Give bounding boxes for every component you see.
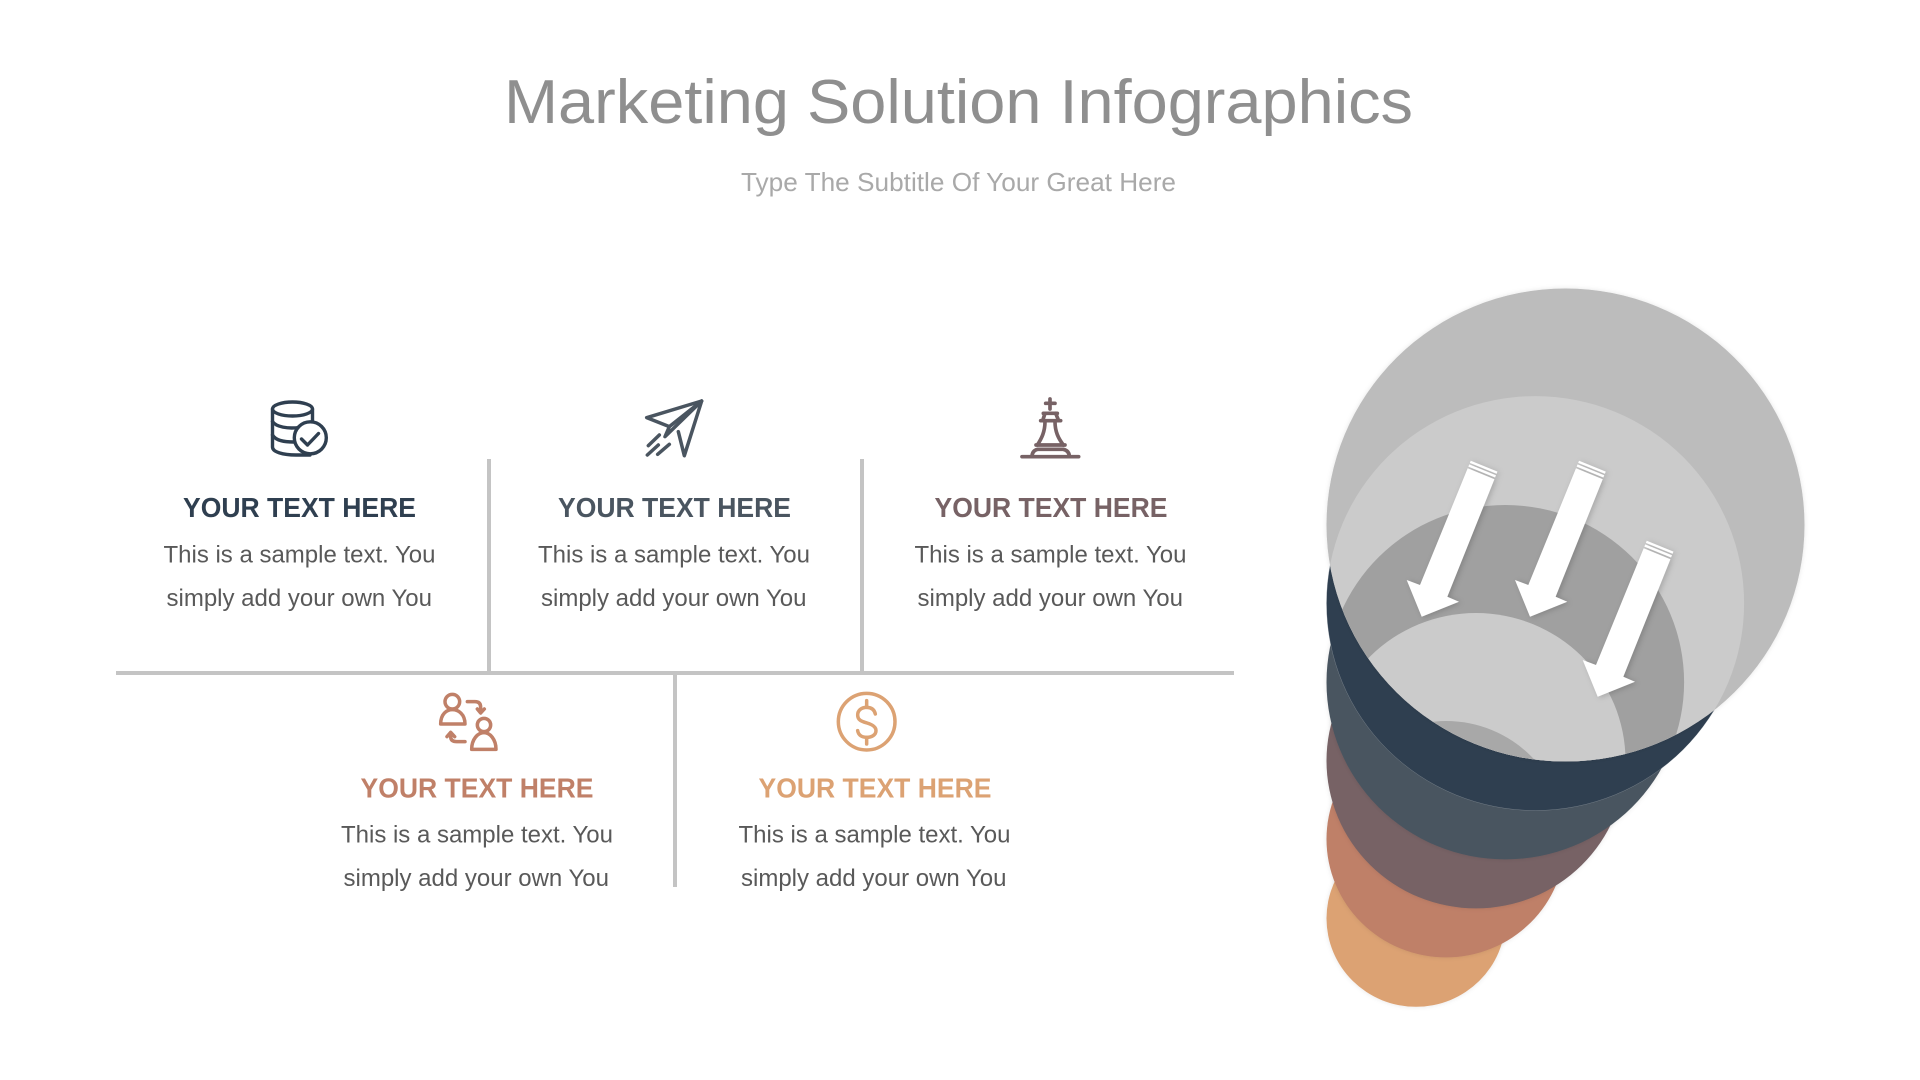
body text: This is a sample text. You [538,542,810,568]
funnel graphic [1326,288,1804,1007]
panel: item 4 [341,694,613,892]
panel: item 5 [738,693,1010,892]
panel: item 3 [914,399,1186,612]
icon: database with check [272,402,326,455]
heading: YOUR TEXT HERE [558,492,791,523]
arrow 2 [1515,462,1605,617]
body text: This is a sample text. You [738,822,1010,848]
subtitle: Type The Subtitle Of Your Great Here [741,167,1176,197]
body text: This is a sample text. You [164,542,436,568]
body text [914,542,1186,612]
body text [341,822,613,892]
heading: YOUR TEXT HERE [360,772,594,804]
body text: This is a sample text. You [341,822,613,848]
body text: simply add your own You [918,585,1183,612]
body text: simply add your own You [741,865,1006,892]
divider lines [116,459,1234,887]
icon: paper plane [647,401,702,456]
body text: simply add your own You [166,585,432,612]
funnel layer: brown [1326,613,1626,908]
heading: YOUR TEXT HERE [934,492,1168,523]
heading: YOUR TEXT HERE [183,492,416,523]
funnel layer: terracotta [1326,721,1566,957]
body text [538,542,810,612]
body text [164,542,436,612]
funnel layer: navy [1326,396,1744,810]
body text: simply add your own You [344,865,609,892]
arrow 3 [1583,542,1673,697]
icon: chess king [1022,399,1079,457]
title: Marketing Solution Infographics [504,68,1413,137]
funnel inner rings [1330,396,1744,762]
arrows [1407,462,1673,697]
funnel layer: slate [1326,505,1684,859]
panel: item 2 [538,401,810,612]
icon: dollar coin [838,693,895,750]
panel: item 1 [164,402,436,612]
body text: This is a sample text. You [914,542,1186,568]
body text [738,822,1010,892]
icon: people exchange [441,694,496,749]
funnel mouth [1326,288,1804,762]
body text: simply add your own You [541,585,806,612]
heading: YOUR TEXT HERE [758,772,992,804]
arrow 1 [1407,462,1497,617]
funnel layer: sand [1326,830,1506,1007]
